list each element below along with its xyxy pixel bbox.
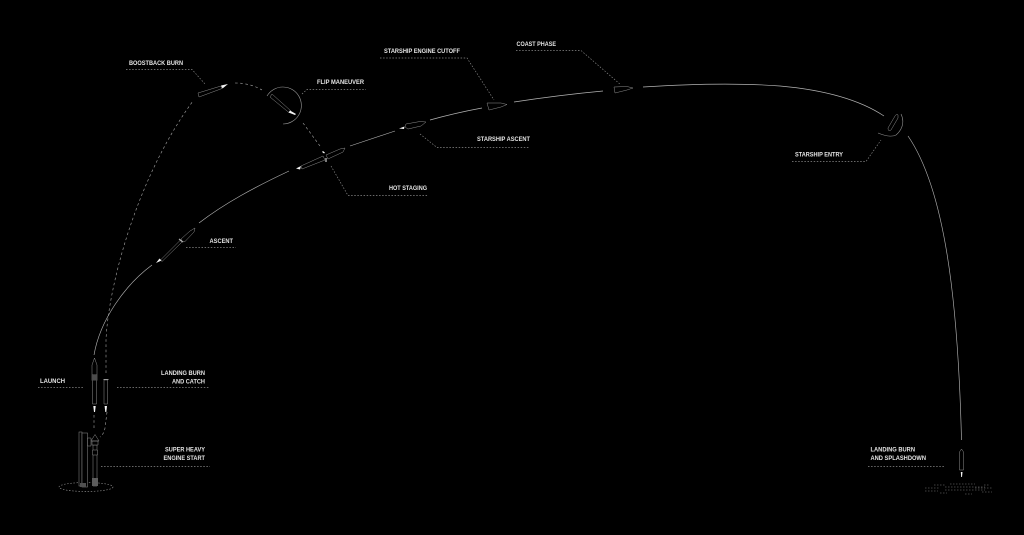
label: starship engine cutoff: STARSHIP ENGINE CUTOFF: [384, 48, 460, 55]
icon: landing rocket: [960, 449, 964, 477]
label: hot staging: [331, 166, 428, 196]
label: starship entry: [792, 140, 881, 162]
label: landing burn and splashdown: AND SPLASHDOWN: [870, 455, 926, 462]
icon: launch pad with tower and rocket: [59, 432, 113, 492]
label: landing burn and catch: AND CATCH: [172, 378, 205, 386]
label: flip maneuver: [302, 79, 366, 94]
label: launch: LAUNCH: [40, 378, 65, 385]
water splash: [925, 484, 992, 494]
icon: starship engine cutoff: [487, 103, 507, 110]
label: starship ascent: [420, 134, 530, 148]
label: starship engine cutoff: [380, 48, 494, 100]
icon: starship ascent: [399, 122, 426, 129]
label: coast phase: COAST PHASE: [516, 41, 557, 48]
label: starship entry: STARSHIP ENTRY: [795, 152, 844, 158]
label: boostback burn: BOOSTBACK BURN: [129, 60, 183, 67]
label: landing burn and splashdown: LANDING BURN: [870, 446, 915, 454]
label: super heavy engine start: SUPER HEAVY: [165, 446, 206, 454]
label: boostback burn: [126, 60, 205, 84]
icon: hot staging rockets: [296, 148, 345, 170]
icon: returning booster: [104, 380, 108, 412]
icon: boostback burn booster: [198, 84, 228, 97]
label: ascent: ASCENT: [210, 238, 233, 245]
label: flip maneuver: FLIP MANEUVER: [317, 79, 364, 86]
descent trajectory: [908, 136, 962, 440]
label: landing burn and splashdown: [868, 446, 945, 466]
label: landing burn and catch: [117, 370, 210, 388]
label: super heavy engine start: [101, 446, 210, 466]
icon: starship entry: [878, 114, 903, 136]
icon: rocket on ascent: [156, 228, 195, 263]
icon: starship coast: [614, 86, 633, 93]
label: coast phase: [516, 41, 621, 85]
label: hot staging: HOT STAGING: [389, 185, 427, 192]
booster return trajectory: [94, 83, 320, 437]
label: ascent: [186, 238, 236, 248]
ascent trajectory: [94, 84, 884, 355]
icon: flip maneuver: [267, 87, 301, 124]
label: starship ascent: STARSHIP ASCENT: [477, 136, 530, 143]
label: launch: [38, 378, 84, 388]
label: super heavy engine start: ENGINE START: [164, 455, 205, 462]
icon: launch rocket: [92, 358, 98, 412]
label: landing burn and catch: LANDING BURN: [161, 370, 205, 377]
